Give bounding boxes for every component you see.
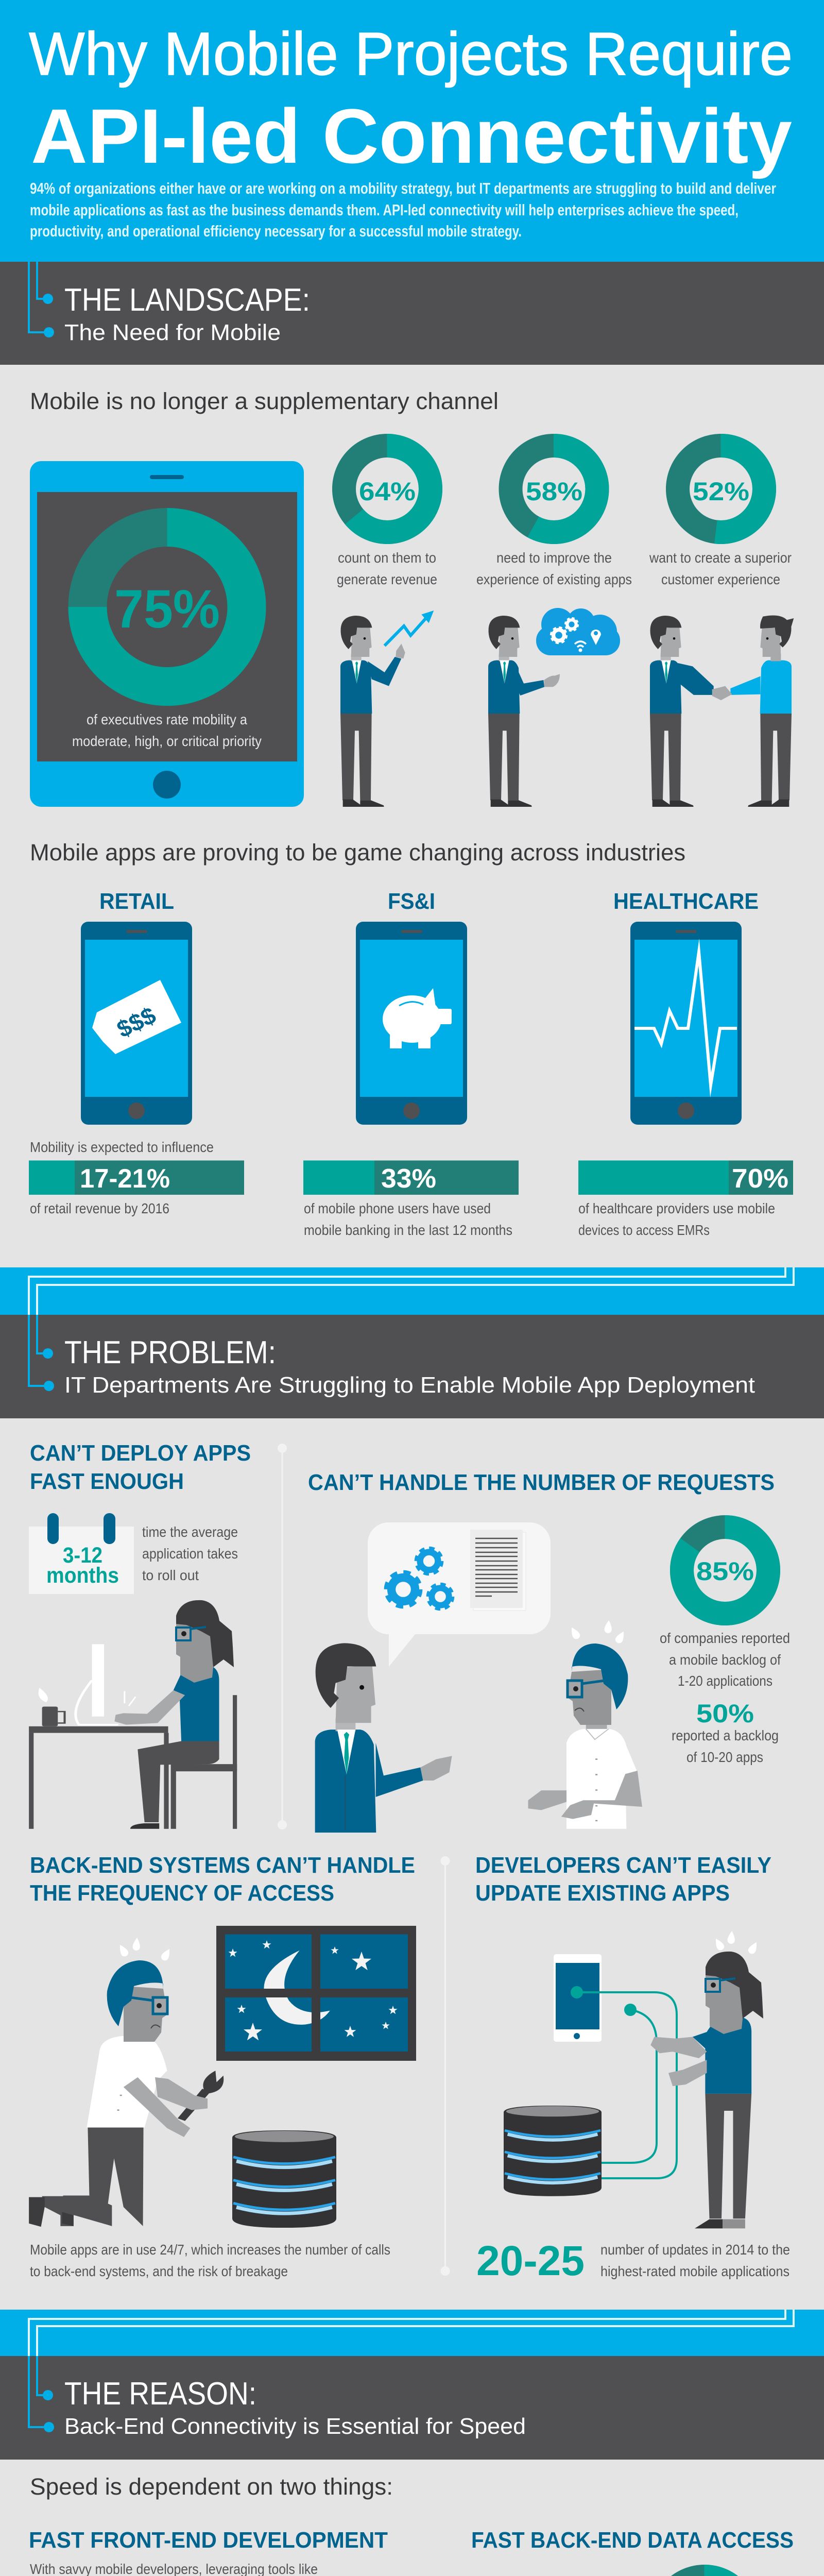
heading: CAN’T DEPLOY APPS <box>30 1440 251 1466</box>
heading: DEVELOPERS CAN’T EASILY <box>475 1853 771 1878</box>
figure: man pointing at rising arrow <box>340 611 434 807</box>
panel: financial services: of mobile phone users have used <box>304 1200 491 1216</box>
stat: 64% generate revenue: count on them to <box>338 550 436 566</box>
icon: database <box>232 2130 336 2228</box>
stat: 52% customer experience <box>649 446 792 587</box>
stat: 64% generate revenue: generate revenue <box>337 571 437 587</box>
stat: 85% backlog: 1-20 applications <box>678 1673 772 1689</box>
stat: 85% backlog <box>660 1527 790 1765</box>
stat: 58% improve experience: need to improve the <box>496 550 612 566</box>
icon: database <box>504 2106 602 2196</box>
panel: can't handle the number of requests: CAN’T HANDLE THE NUMBER OF REQUESTS <box>308 1470 775 1495</box>
panel: healthcare: of healthcare providers use mobile <box>578 1200 775 1216</box>
banner heading: THE LANDSCAPE: <box>64 282 310 318</box>
calendar caption: time the average <box>142 1524 238 1540</box>
heading: THE FREQUENCY OF ACCESS <box>30 1880 334 1906</box>
calendar caption: application takes <box>142 1546 238 1562</box>
stat: 85% backlog: reported a backlog <box>672 1727 779 1743</box>
stat: 52% customer experience: customer experience <box>661 571 780 587</box>
stat bar: 17-21% <box>29 1160 244 1195</box>
caption: to back-end systems, and the risk of breakage <box>30 2263 288 2279</box>
panel: retail: of retail revenue by 2016 <box>30 1200 169 1216</box>
calendar caption: to roll out <box>142 1567 199 1583</box>
stat: 85% backlog: of 10-20 apps <box>686 1749 763 1765</box>
divider <box>278 1444 287 1829</box>
tablet caption: of executives rate mobility a <box>87 711 247 727</box>
stat: 58% improve experience: experience of existing apps <box>476 571 632 587</box>
stat: 85% backlog: of companies reported <box>660 1630 790 1646</box>
stat bar: 17-21%: 17-21% <box>80 1164 170 1194</box>
divider <box>441 1856 450 2276</box>
stat: 85% backlog: a mobile backlog of <box>669 1652 781 1668</box>
icon: cloud with gears, wifi and pin <box>536 608 620 655</box>
stat bar: 70% <box>578 1160 793 1195</box>
panel: can't handle the number of requests <box>308 1470 790 1833</box>
stat: 64% generate revenue: 64% <box>359 477 416 506</box>
section banner: the problem <box>0 1267 824 1418</box>
stat: 58% improve experience: 58% <box>526 477 582 506</box>
icon: phone with heartbeat <box>630 922 742 1125</box>
icon: phone with price tag <box>81 922 192 1125</box>
panel: fast front-end development: FAST FRONT-END DEVELOPMENT <box>29 2528 388 2553</box>
panel: retail <box>29 889 244 1216</box>
icon: phone <box>554 1954 602 2042</box>
heading <box>30 1440 251 1494</box>
figure: kneeling man with wrench <box>29 1937 224 2227</box>
stat: 20-25 updates: 20-25 <box>476 2238 585 2284</box>
panel: fast back-end data access: FAST BACK-END DATA ACCESS <box>471 2528 794 2553</box>
banner heading: THE PROBLEM: <box>64 1335 276 1370</box>
banner subheading: The Need for Mobile <box>64 320 281 345</box>
caption: Mobile apps are in use 24/7, which increases the number of calls <box>30 2242 390 2258</box>
section banner: the reason <box>0 2310 824 2460</box>
stat bar: 33%: 33% <box>381 1164 436 1194</box>
figure: manager explaining <box>315 1643 452 1833</box>
intro paragraph: productivity, and operational efficiency necessary for a successful mobile strategy. <box>30 222 522 240</box>
donut chart: 75%: 75% <box>114 579 220 639</box>
panel: fast front-end development <box>29 2528 438 2576</box>
stat: 52% customer experience: 52% <box>693 477 749 506</box>
heading: FAST ENOUGH <box>30 1469 184 1494</box>
caption <box>30 2242 390 2279</box>
heading: game changing: Mobile apps are proving to be game changing across industries <box>30 839 685 866</box>
icon: phone with piggy bank <box>356 922 467 1125</box>
title line 1: Why Mobile Projects Require <box>29 20 793 88</box>
icon: calendar 3-12 months <box>29 1513 134 1594</box>
figure: man with cloud <box>488 608 620 807</box>
stat: 20-25 updates <box>476 2238 790 2284</box>
panel: financial services: FS&I <box>388 889 435 914</box>
panel: financial services: mobile banking in the last 12 months <box>304 1222 512 1238</box>
intro paragraph <box>30 179 776 240</box>
stat: 52% customer experience: want to create a superior <box>649 550 792 566</box>
stat bar: 70%: 70% <box>732 1164 788 1194</box>
heading: supplementary channel: Mobile is no longer a supplementary channel <box>30 388 499 414</box>
figure: two men shaking hands <box>650 615 794 807</box>
panel: healthcare: HEALTHCARE <box>613 889 759 914</box>
stat: 20-25 updates: highest-rated mobile applications <box>600 2263 789 2279</box>
speech bubble with gears and document <box>368 1522 551 1667</box>
panel: healthcare: devices to access EMRs <box>578 1222 710 1238</box>
panel: healthcare <box>578 889 793 1238</box>
icon: calendar 3-12 months: months <box>46 1563 119 1588</box>
stat: 20-25 updates: number of updates in 2014 to the <box>600 2242 790 2258</box>
panel: developers can't update apps <box>475 1853 790 2284</box>
section banner: the landscape <box>0 262 824 365</box>
panel: tablet with 75% stat <box>30 461 304 807</box>
panel: retail: RETAIL <box>99 889 174 914</box>
panel: retail: Mobility is expected to influence <box>30 1139 214 1155</box>
heading: BACK-END SYSTEMS CAN’T HANDLE <box>30 1853 415 1878</box>
wires: phone to database <box>571 1986 677 2178</box>
stat: 64% generate revenue <box>337 446 437 587</box>
tablet caption <box>72 711 262 749</box>
heading <box>475 1853 771 1906</box>
icon: night window <box>216 1926 416 2061</box>
heading: UPDATE EXISTING APPS <box>475 1880 730 1906</box>
stat: 85% backlog: 85% <box>696 1557 754 1586</box>
stat: 58% improve experience <box>476 446 632 587</box>
banner subheading: IT Departments Are Struggling to Enable Mobile App Deployment <box>64 1372 755 1398</box>
tablet caption: moderate, high, or critical priority <box>72 733 262 749</box>
stat bar: 33% <box>303 1160 519 1195</box>
panel: financial services <box>303 889 519 1238</box>
figure: woman working at desk <box>29 1600 237 1829</box>
title line 2: API-led Connectivity <box>31 93 792 179</box>
icon: phone with price tag: $$$ <box>113 1002 160 1043</box>
donut chart: 75% <box>88 528 247 686</box>
calendar caption <box>142 1524 238 1583</box>
icon: calendar 3-12 months: 3-12 <box>63 1543 102 1568</box>
figure: woman with wires <box>650 1930 763 2228</box>
banner subheading: Back-End Connectivity is Essential for Speed <box>64 2414 526 2439</box>
panel: back-end systems can't handle frequency <box>29 1853 416 2279</box>
header panel <box>0 0 824 262</box>
figure: worried developer <box>528 1620 642 1829</box>
banner heading: THE REASON: <box>64 2376 256 2412</box>
heading: speed: Speed is dependent on two things: <box>30 2473 393 2500</box>
stat: 85% backlog: 50% <box>696 1699 754 1728</box>
panel: can't deploy apps fast enough <box>29 1440 251 1829</box>
heading <box>30 1853 415 1906</box>
